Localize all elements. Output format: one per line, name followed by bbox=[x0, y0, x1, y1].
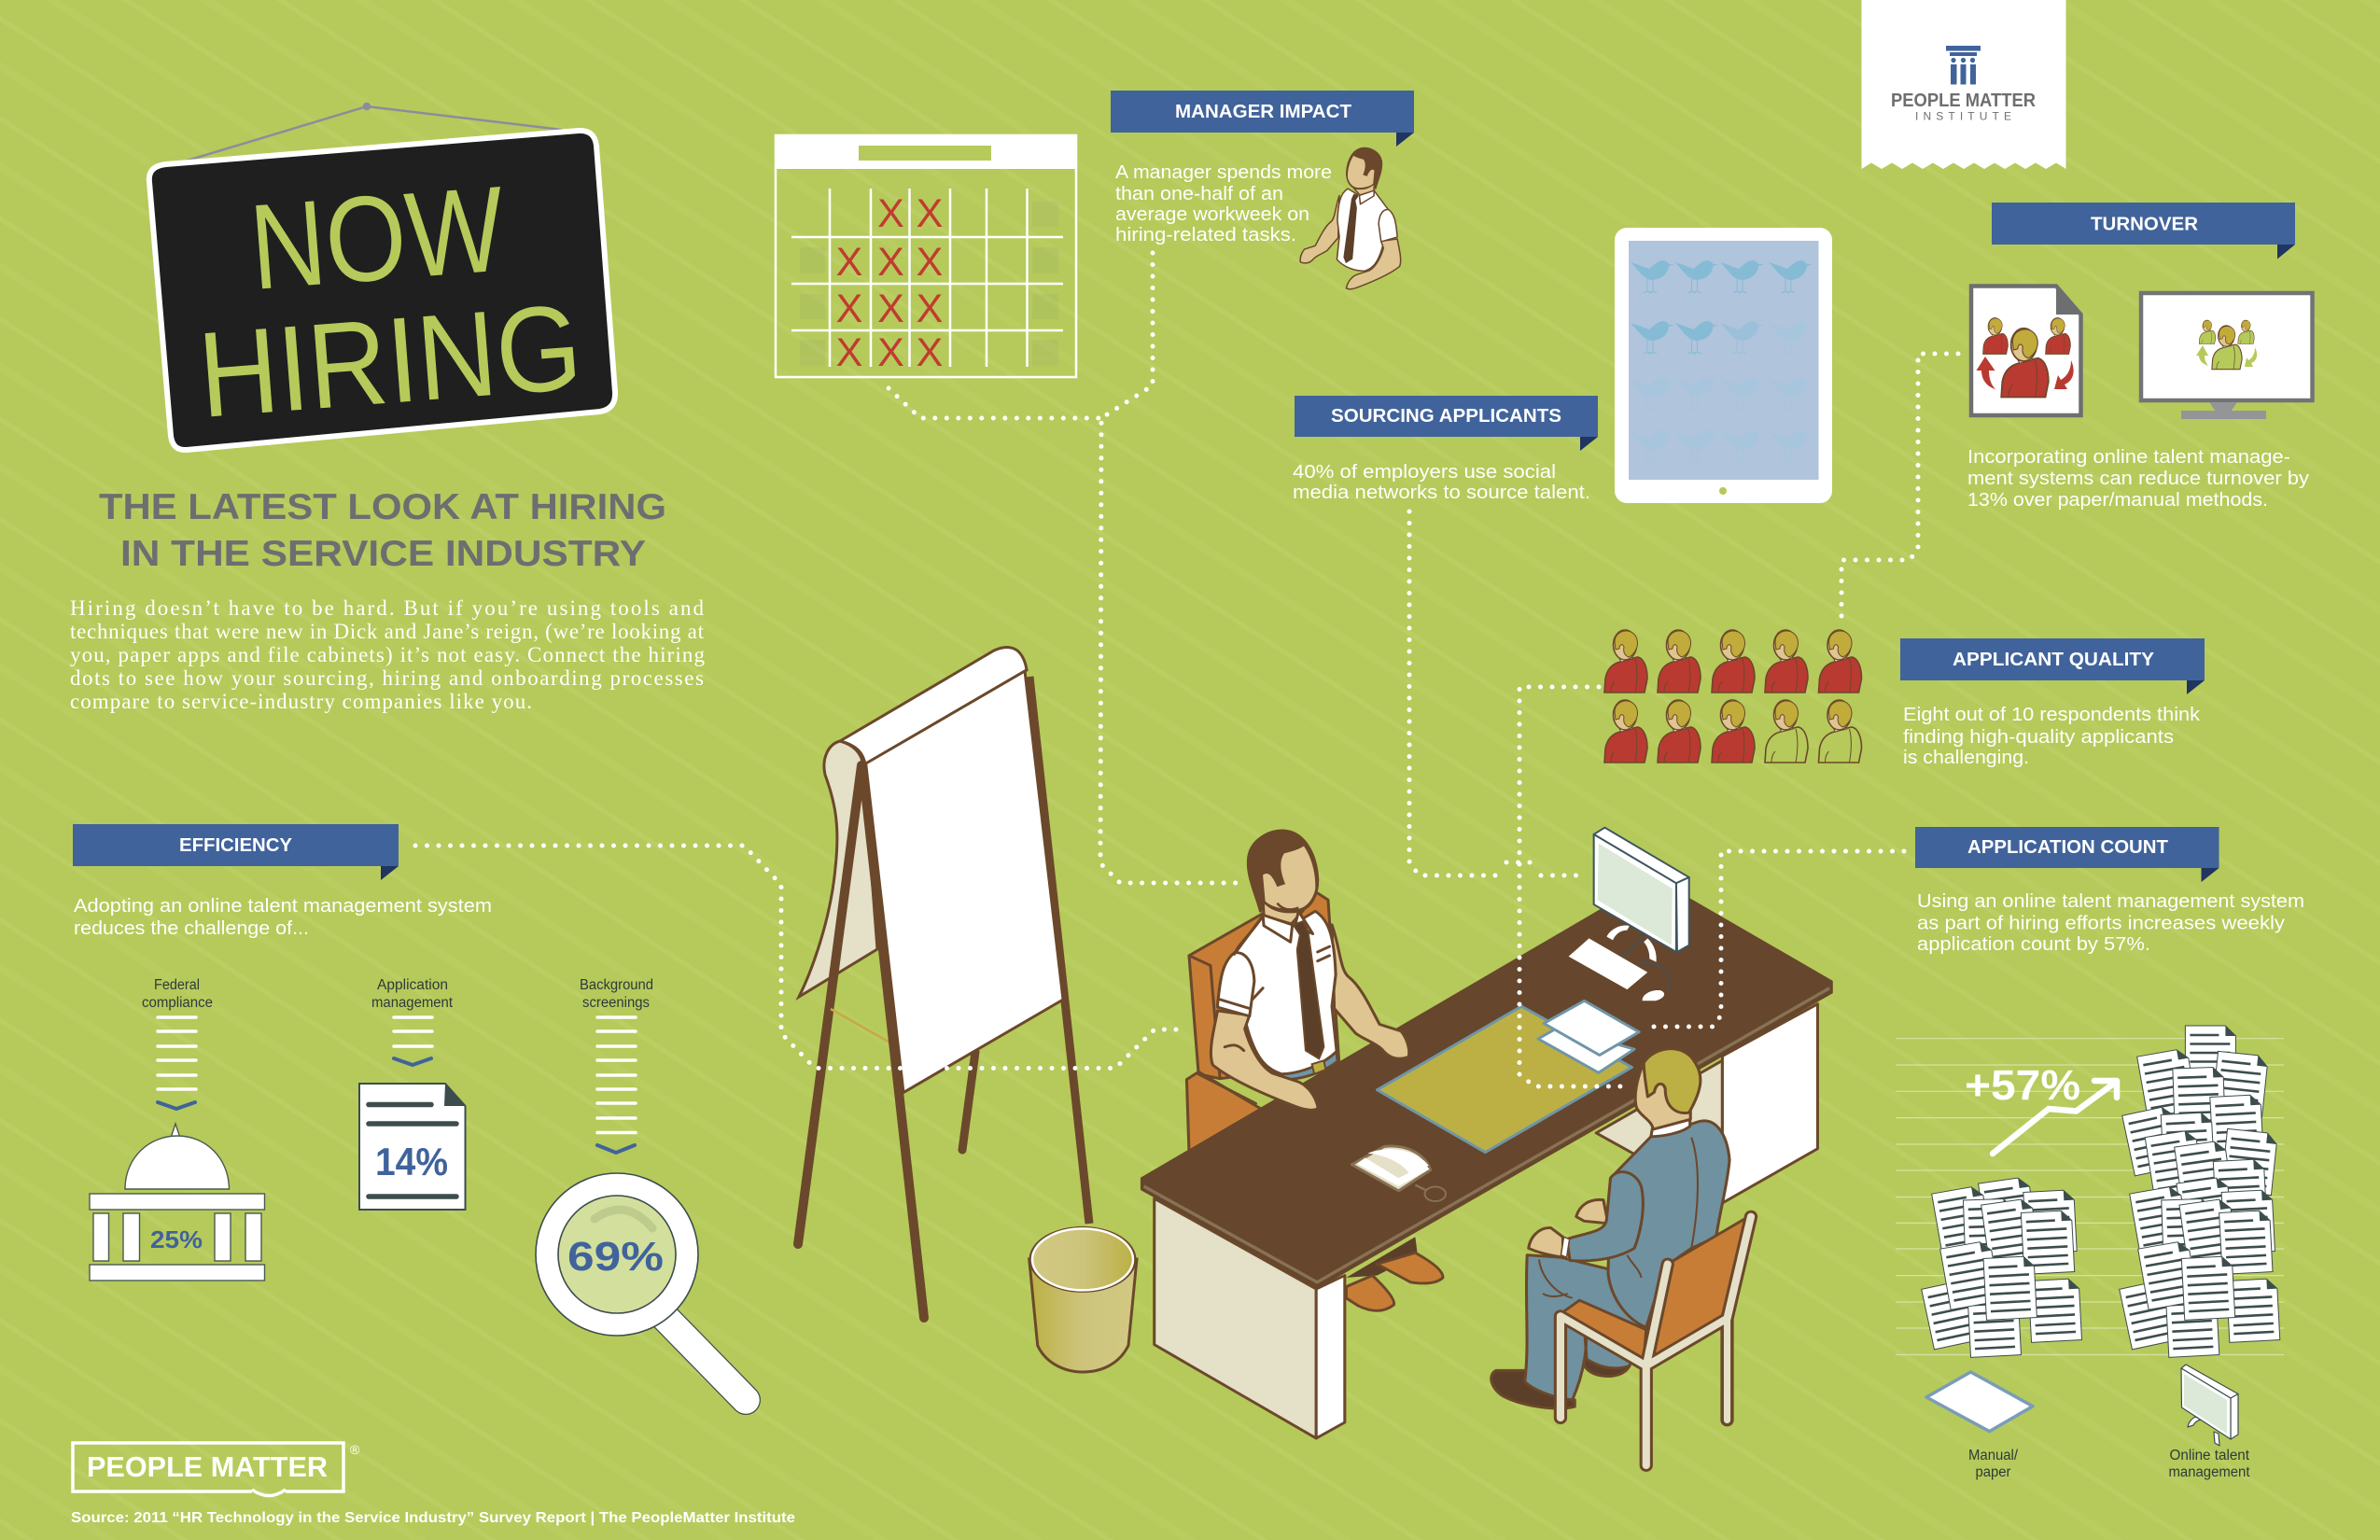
label: application management: Application bbox=[377, 977, 448, 993]
institute wordmark: PEOPLE MATTER bbox=[1891, 90, 2036, 111]
turnover text: Incorporating online talent manage- bbox=[1967, 446, 2290, 468]
manager figure bbox=[1211, 831, 1409, 1110]
calendar: X bbox=[877, 240, 904, 285]
manager impact text: A manager spends more bbox=[1115, 161, 1332, 183]
desk bbox=[1141, 878, 1832, 1438]
application count text: application count by 57%. bbox=[1917, 933, 2150, 955]
peoplematter logo: ® bbox=[350, 1442, 360, 1457]
icon: online monitor bbox=[2181, 1365, 2238, 1446]
ribbon: applicant quality: APPLICANT QUALITY bbox=[1953, 650, 2155, 670]
application count text bbox=[1917, 890, 2304, 955]
panel: manager impact bbox=[1111, 91, 1414, 289]
+57% label: +57% bbox=[1965, 1061, 2080, 1109]
desk phone bbox=[1351, 1146, 1446, 1201]
intro paragraph bbox=[70, 596, 706, 713]
manager impact text bbox=[1115, 161, 1332, 245]
arrow: application bbox=[394, 1017, 432, 1065]
icon: small manager bbox=[1300, 147, 1401, 289]
label: manual paper: paper bbox=[1975, 1464, 2010, 1480]
sourcing text: media networks to source talent. bbox=[1293, 482, 1590, 503]
manager impact text: average workweek on bbox=[1115, 203, 1309, 225]
turnover text bbox=[1967, 446, 2310, 511]
connector: efficiency dots bbox=[415, 846, 1183, 1068]
illustration: waste basket bbox=[1029, 1226, 1137, 1372]
ribbon: sourcing applicants: SOURCING APPLICANTS bbox=[1331, 406, 1561, 427]
peoplematter logo bbox=[73, 1442, 360, 1495]
icon: magnifier 69%: 69% bbox=[567, 1234, 664, 1280]
efficiency text bbox=[74, 895, 492, 939]
main heading bbox=[99, 487, 666, 574]
connector: calendar dots bbox=[889, 388, 1101, 418]
calendar: X bbox=[917, 240, 943, 285]
ribbon: turnover bbox=[1992, 203, 2295, 259]
label: manual paper bbox=[1968, 1448, 2019, 1480]
computer bbox=[1569, 828, 1689, 1001]
intro paragraph: techniques that were new in Dick and Jane’s reign, (we’re looking at bbox=[70, 620, 705, 643]
panel: application count bbox=[1896, 827, 2304, 1480]
illustration: flip chart easel bbox=[798, 648, 1089, 1318]
efficiency text: Adopting an online talent management system bbox=[74, 895, 492, 917]
arrow: federal bbox=[158, 1017, 196, 1109]
turnover text: ment systems can reduce turnover by bbox=[1967, 468, 2310, 489]
chart gridlines and piles bbox=[1896, 1026, 2284, 1357]
icon: monitor turnover bbox=[2141, 293, 2313, 419]
intro paragraph: you, paper apps and file cabinets) it’s not easy. Connect the hiring bbox=[70, 643, 706, 666]
label: application management: management bbox=[371, 995, 454, 1011]
institute tag bbox=[1861, 0, 2066, 169]
now hiring sign bbox=[149, 104, 615, 450]
intro paragraph: compare to service-industry companies like you. bbox=[70, 690, 532, 713]
sign hanger bbox=[181, 104, 562, 162]
icon: document 14%: 14% bbox=[375, 1140, 448, 1183]
arrow: growth bbox=[1993, 1081, 2117, 1154]
ribbon: manager impact bbox=[1111, 91, 1414, 147]
sign text: HIRING bbox=[194, 278, 586, 443]
connector: applicant quality dots bbox=[1519, 687, 1622, 1086]
connector: sourcing dots bbox=[1409, 511, 1582, 875]
efficiency text: reduces the challenge of... bbox=[74, 917, 309, 939]
sourcing text: 40% of employers use social bbox=[1293, 461, 1556, 483]
sign text bbox=[194, 160, 586, 443]
calendar: X bbox=[836, 287, 862, 331]
manager chair bbox=[1186, 893, 1339, 1152]
label: online talent management bbox=[2169, 1448, 2250, 1480]
icon: capitol building 25%: 25% bbox=[150, 1225, 203, 1253]
sourcing text bbox=[1293, 461, 1590, 503]
ribbon: manager impact: MANAGER IMPACT bbox=[1175, 102, 1351, 122]
intro paragraph: Hiring doesn’t have to be hard. But if you’re using tools and bbox=[70, 596, 704, 620]
quality text bbox=[1903, 704, 2201, 768]
pile: online talent management bbox=[2120, 1026, 2280, 1357]
application count text: Using an online talent management system bbox=[1917, 890, 2304, 912]
panel: applicant quality bbox=[1604, 630, 2205, 768]
panel: sourcing applicants bbox=[1293, 228, 1832, 503]
illustration: interview at desk bbox=[1141, 828, 1832, 1465]
icon: tablet with birds bbox=[1615, 228, 1832, 503]
application count text: as part of hiring efforts increases weekly bbox=[1917, 913, 2286, 933]
pile: manual paper bbox=[1922, 1177, 2081, 1357]
ribbon: sourcing applicants bbox=[1295, 396, 1598, 451]
connector: application count dots bbox=[1646, 851, 1904, 1027]
label: background screenings: Background bbox=[580, 977, 653, 993]
panel: efficiency bbox=[73, 824, 746, 1400]
icon: magnifier 69% bbox=[536, 1173, 746, 1400]
sign text: NOW bbox=[245, 160, 510, 315]
icon: document 14% bbox=[359, 1084, 465, 1210]
calendar bbox=[776, 135, 1076, 377]
desk papers bbox=[1538, 1001, 1639, 1072]
calendar: X bbox=[917, 330, 943, 375]
peoplematter logo: PEOPLE MATTER bbox=[87, 1450, 328, 1483]
desk blotter bbox=[1378, 1006, 1631, 1153]
icon: pillar bbox=[1946, 46, 1981, 84]
arrow: background bbox=[597, 1017, 636, 1153]
label: federal compliance: Federal bbox=[154, 977, 200, 993]
quality text: finding high-quality applicants bbox=[1903, 726, 2174, 748]
calendar: X bbox=[877, 330, 904, 375]
calendar: X bbox=[917, 287, 943, 331]
quality text: is challenging. bbox=[1903, 747, 2029, 768]
quality text: Eight out of 10 respondents think bbox=[1903, 704, 2201, 725]
label: online talent management: management bbox=[2169, 1464, 2250, 1480]
connector: turnover dots bbox=[1841, 354, 1958, 620]
ribbon: turnover: TURNOVER bbox=[2091, 215, 2199, 235]
institute wordmark: INSTITUTE bbox=[1915, 110, 2011, 123]
connector: manager impact dots bbox=[1100, 253, 1243, 883]
calendar: X bbox=[917, 191, 943, 236]
intro paragraph: dots to see how your sourcing, hiring and onboarding processes bbox=[70, 666, 704, 690]
label: application management bbox=[371, 977, 454, 1011]
label: manual paper: Manual/ bbox=[1968, 1448, 2019, 1463]
main heading: THE LATEST LOOK AT HIRING bbox=[99, 487, 666, 527]
ribbon: efficiency: EFFICIENCY bbox=[179, 835, 293, 856]
label: background screenings bbox=[580, 977, 653, 1011]
calendar: X bbox=[836, 240, 862, 285]
customer figure bbox=[1491, 1049, 1729, 1408]
sign board bbox=[149, 131, 615, 450]
ribbon: applicant quality bbox=[1900, 638, 2205, 694]
calendar: X bbox=[877, 191, 904, 236]
ribbon: application count bbox=[1915, 827, 2219, 882]
ribbon: application count: APPLICATION COUNT bbox=[1967, 837, 2168, 858]
main heading: IN THE SERVICE INDUSTRY bbox=[120, 534, 646, 574]
icon: manual paper bbox=[1926, 1372, 2033, 1432]
calendar: X bbox=[877, 287, 904, 331]
panel: turnover bbox=[1967, 203, 2313, 511]
manager impact text: hiring-related tasks. bbox=[1115, 224, 1296, 245]
icon: paper turnover bbox=[1971, 285, 2082, 415]
source line: Source: 2011 “HR Technology in the Service Industry” Survey Report | The PeopleMatter Institute bbox=[71, 1510, 795, 1526]
label: federal compliance: compliance bbox=[142, 995, 213, 1011]
calendar: X bbox=[836, 330, 862, 375]
icon: capitol building 25% bbox=[90, 1124, 265, 1281]
institute wordmark bbox=[1891, 90, 2036, 123]
manager impact text: than one-half of an bbox=[1115, 183, 1283, 204]
label: background screenings: screenings bbox=[582, 995, 650, 1011]
ribbon: efficiency bbox=[73, 824, 399, 880]
customer chair bbox=[1561, 1217, 1751, 1465]
turnover text: 13% over paper/manual methods. bbox=[1967, 489, 2268, 511]
label: federal compliance bbox=[142, 977, 213, 1011]
pictogram: 8 of 10 people bbox=[1604, 630, 1861, 763]
manager shoes bbox=[1346, 1237, 1443, 1310]
label: online talent management: Online talent bbox=[2169, 1448, 2250, 1463]
